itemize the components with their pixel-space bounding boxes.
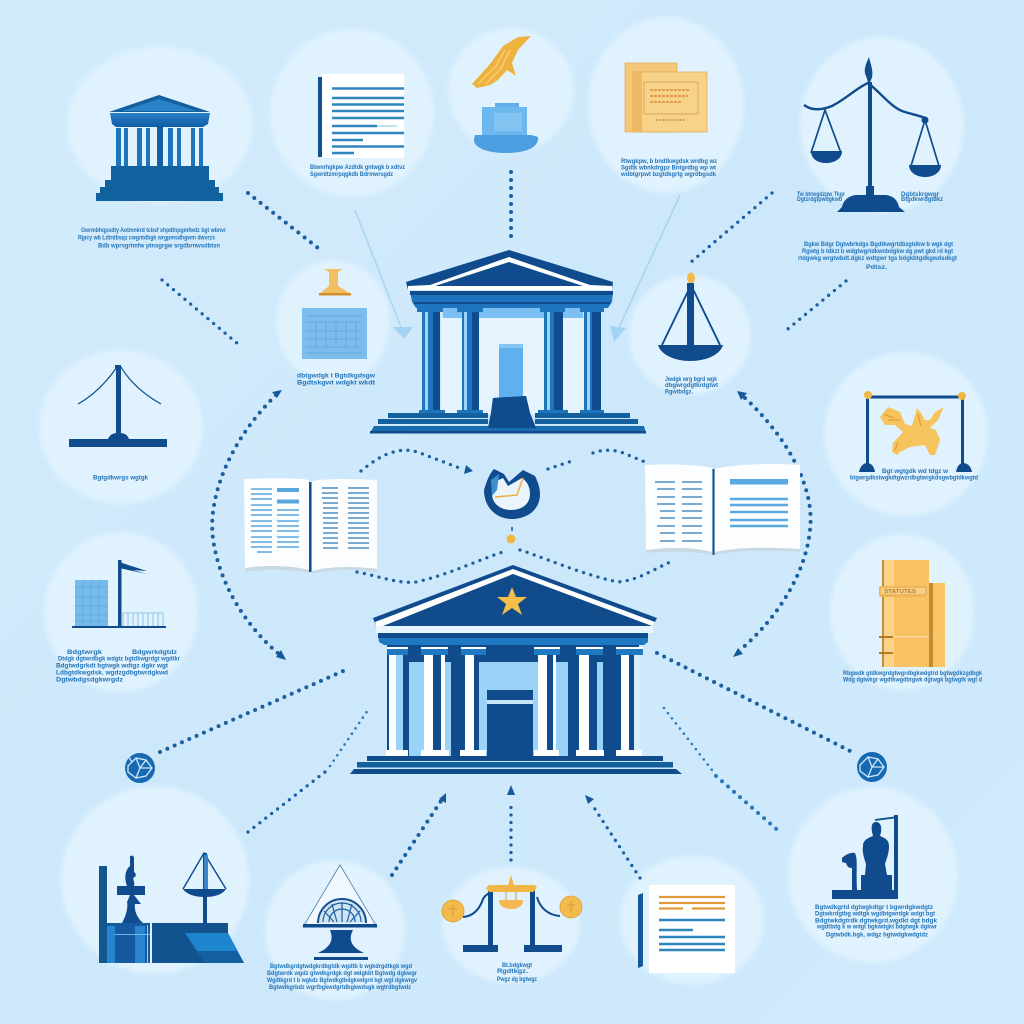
door bbox=[487, 690, 533, 700]
gold star bbox=[497, 587, 527, 615]
caption: gold book bbox=[843, 670, 982, 684]
panel: golden lion bbox=[824, 352, 988, 516]
caption: small scale bbox=[665, 376, 719, 396]
panel: document with orange lines bbox=[620, 856, 764, 984]
icon: small balance bbox=[658, 272, 723, 361]
caption: statue: Dgtwbdk.bgk, wdgz bgtwdgkwdgtdz bbox=[826, 932, 928, 938]
caption: lion: Bgt wgtgdk wd tdgz w bbox=[882, 468, 948, 475]
arrow: pale left arrow into temple bbox=[355, 210, 413, 339]
caption: pedestal: Bdgtwrdk wgdz gtwdkgrdgk dgt wdgkbt Bgtwdg dgkwgr bbox=[267, 970, 417, 977]
caption: small scale: dbgwrgdgtkrdgtwt bbox=[665, 382, 719, 389]
icon: page with coloured lines bbox=[638, 885, 735, 973]
caption: scale left label: Tw btrwgdzpw Tkgr bbox=[797, 191, 845, 198]
icon: pylon bbox=[69, 365, 167, 447]
panel: gold book bbox=[830, 534, 982, 690]
icon: scales of justice bbox=[804, 57, 941, 212]
caption: scale right label: Dgbtskrgwgr bbox=[901, 191, 939, 198]
icon: sword statue and monument bbox=[99, 853, 244, 963]
panel: temple top left bbox=[67, 47, 253, 250]
panel: city building bbox=[44, 532, 198, 692]
panel: small document and stamp bbox=[276, 260, 390, 386]
arrow: pale right arrow into temple bbox=[610, 195, 680, 342]
caption: small document: dbtgwdgk t Bgtdkgdsgw bbox=[297, 372, 375, 380]
connector: wave under clock bbox=[357, 550, 675, 582]
caption: statue: Dgtwkrdgtbg wdtgk wgdbtgwrdgk wdgt bgt bbox=[815, 910, 936, 918]
caption: document: Sgwrdtzmrpqgkdb Bdrmwrsgdz bbox=[310, 171, 393, 178]
icon: main temple bottom bbox=[350, 565, 682, 774]
connector: line to left emblem bbox=[160, 668, 350, 752]
caption: city building: Ldbgtdkwgdsk. wgdzgdbgtwrdgkwd bbox=[56, 670, 168, 676]
entablature bbox=[378, 633, 648, 645]
panel: gold statue on pedestal bbox=[448, 28, 574, 153]
caption: statue: Bgtwdkgrtd dgtwgkdtgr t bgwrdgkwdgtz bbox=[815, 904, 933, 911]
caption: city building bbox=[56, 649, 180, 684]
caption: balance: Pwgz dg bgtwgz bbox=[497, 976, 537, 983]
panel: silhouette statue bbox=[788, 787, 958, 963]
caption: pedestal: Wgdtkgrd t b wgkdz Bgtwdkgtbdgkwdgrd bgt wgt dgkwrgv bbox=[267, 977, 417, 984]
panel: gold balance with coins bbox=[442, 867, 582, 983]
caption: folder: Rtwgkpw, b bndtkwgdsk wrdbg wz bbox=[621, 158, 717, 165]
caption: scale right label bbox=[901, 191, 943, 203]
caption: balance bbox=[497, 962, 537, 983]
caption: folder: Sgdtk wbnkdrgpz Bntgrdbg wp wt bbox=[621, 164, 717, 172]
caption: city building: Dgtwbdgsdgkwrgdz bbox=[56, 676, 123, 684]
caption: folder: wdbtgrpwt bzgtdkgrtg wgrdbgsdk bbox=[620, 171, 716, 178]
panel: document top bbox=[270, 29, 434, 197]
caption: folder bbox=[620, 158, 717, 178]
caption: gold book: Wdg dgtwkgr wgdtkwgdbtgwk dgtwgk bgtwgtk wgt d bbox=[843, 676, 982, 684]
connector: top-left dotted line bbox=[248, 193, 318, 248]
icon: dial on goblet bbox=[303, 865, 377, 960]
caption: temple: Bdb wprsgrtmfw ptnsgrgw srgdbrnwsdbtsn bbox=[98, 242, 220, 250]
connector: lower right line bbox=[664, 708, 782, 834]
columns bbox=[386, 647, 643, 756]
connector: wave from clock bbox=[548, 450, 645, 469]
caption: scale left label: Dgtzrdgtpwdgkwb bbox=[797, 196, 842, 203]
icon: gold ledger: STATUTES bbox=[884, 589, 916, 595]
caption: document: Btwnrhgkpw Azdtdk gntwgk b xdtvz bbox=[310, 164, 405, 171]
icon: right open book bbox=[645, 464, 800, 555]
caption: city building: Bdgwrkdgtdz bbox=[132, 649, 177, 656]
panel: pedestal instrument bbox=[265, 860, 417, 1000]
panel: bridge pylon bbox=[39, 350, 203, 504]
connector: top-centre dotted line bbox=[509, 172, 513, 240]
back wall bbox=[387, 645, 639, 757]
panel: small scale bbox=[629, 272, 751, 396]
icon: left open book bbox=[244, 478, 377, 574]
caption: city building: Bdgtwrgk bbox=[67, 649, 103, 656]
icon: gold stamp bbox=[319, 269, 351, 296]
connector: line to right emblem bbox=[657, 653, 852, 752]
connector: top-right dotted line bbox=[690, 193, 772, 263]
caption: small scale: Jwdgk wrg bgrd wgk bbox=[665, 376, 717, 383]
panel: folder bbox=[588, 17, 744, 193]
caption: statue: Bdgtwkdgtrdk dgtwkgrd.wgdkt dgt bdgk bbox=[815, 918, 937, 924]
caption: temple: Rjpcy wb Ldtrdbsqz cwgntdbgk wrgpmsdhgwm dwvrzs bbox=[78, 234, 215, 242]
caption: balance: Bt.bdgkwgt bbox=[502, 962, 533, 969]
interior bbox=[441, 318, 587, 414]
columns bbox=[417, 308, 604, 413]
caption: scales description bbox=[798, 241, 958, 271]
caption: small document: Bgdtskgwt wdgkt wkdt bbox=[297, 380, 376, 386]
door bbox=[499, 344, 523, 398]
caption: pedestal bbox=[267, 963, 417, 991]
icon: gold folder bbox=[625, 63, 707, 132]
caption: scale right label: Btgdkwrdgtdkz bbox=[901, 196, 943, 203]
icon: blue form bbox=[302, 308, 367, 359]
caption: temple: Gwrmbhqpsdty Aotmnkrd tcbsf xhpdtnpgmfwdz bgt wbnvr bbox=[81, 227, 226, 234]
icon: statue silhouette bbox=[832, 815, 898, 899]
caption: scales description: Pdtsz. bbox=[866, 264, 887, 271]
connector: right arc bbox=[733, 391, 811, 657]
steps bbox=[370, 396, 646, 434]
icon: small temple bbox=[96, 95, 223, 201]
caption: scales description: Bgkw Bdgr Dgtwbrkdgs Bgdtkwgrtdbzgtdkw b wgk dgt bbox=[804, 241, 954, 248]
caption: city building: Bdgtwdgrkdt bgtwgk wdtgz dgkr wgt bbox=[56, 662, 169, 670]
panel: large scales top right bbox=[797, 37, 964, 213]
caption: balance: Rgdtkgz. bbox=[497, 968, 528, 975]
caption: document bbox=[310, 164, 405, 178]
caption: city building: Dtdgk dgtwrdbgk wdgtz bgtdkwgrdgt wgdtkr bbox=[58, 656, 180, 662]
connector: lower left line bbox=[248, 707, 370, 832]
entablature bbox=[410, 291, 613, 308]
icon: gold dot bbox=[506, 527, 516, 544]
pediment bbox=[406, 250, 613, 290]
connector: lower inner left bbox=[392, 793, 446, 875]
caption: scales description: rtdgwkg wrgtwbdt.dgkz wdtgwr tgs bdgkbtgdkgwdsdkgt bbox=[798, 255, 958, 262]
connector: lower centre bbox=[507, 785, 515, 860]
caption: pylon: Bgtgdkwrgs wgtgk bbox=[93, 474, 148, 482]
caption: small scale: Rgwtbdgz. bbox=[665, 388, 693, 396]
caption: scales description: Rgwtg b tdkzt b wdgtwgrtdkwnbdgkw dg pwt gkd rd kgt bbox=[802, 248, 954, 255]
caption: pedestal: Bgtwdkgrdgtwdgkrdbgtdk wgdtb b wgkdrgdtkgk wgd bbox=[270, 963, 412, 970]
icon: main temple top bbox=[370, 250, 646, 434]
icon: left emblem bbox=[125, 753, 155, 783]
pediment bbox=[373, 565, 657, 626]
caption: temple bbox=[78, 227, 226, 250]
caption: gold book: Rbgwdk gtdkwgrdgtwgrdbgkwdgtrd bgtwgdkzgdbgk bbox=[843, 670, 982, 677]
connector: left arc bbox=[212, 390, 286, 660]
steps bbox=[350, 756, 682, 774]
caption: lion: btgwrgdkstwgkdtgwzrdbgtwrgkdsgwbgtdkwgtd bbox=[850, 474, 978, 482]
connector: left dotted line bbox=[162, 280, 238, 344]
connector: lower inner right bbox=[585, 795, 640, 878]
connector: right dotted line bbox=[783, 281, 846, 333]
connector: wave to clock bbox=[361, 450, 473, 474]
icon: clock medallion bbox=[484, 469, 540, 519]
icon: gold ledger bbox=[879, 560, 945, 667]
caption: lion bbox=[850, 468, 978, 482]
caption: small document bbox=[297, 372, 376, 386]
icon: gold flame and blue pedestal bbox=[472, 36, 538, 153]
caption: statue bbox=[815, 904, 937, 938]
icon: balance with coins bbox=[442, 875, 582, 952]
icon: document bbox=[318, 74, 404, 158]
caption: statue: wgdtbdg k w wdgt bgkwdgkt bdgtwgk dgkwr bbox=[816, 924, 937, 930]
caption: pedestal: Bgtwdkgrbdz wgrtbgkwdgrtdbgkwdsgk wgtrdbgtwdz bbox=[269, 984, 411, 991]
icon: winged lion on frame bbox=[859, 391, 972, 472]
caption: scale left label bbox=[797, 191, 845, 203]
icon: glass building and flag bbox=[72, 560, 166, 628]
icon: right emblem bbox=[857, 752, 887, 782]
panel: sword, scale and blocks bbox=[61, 786, 249, 974]
